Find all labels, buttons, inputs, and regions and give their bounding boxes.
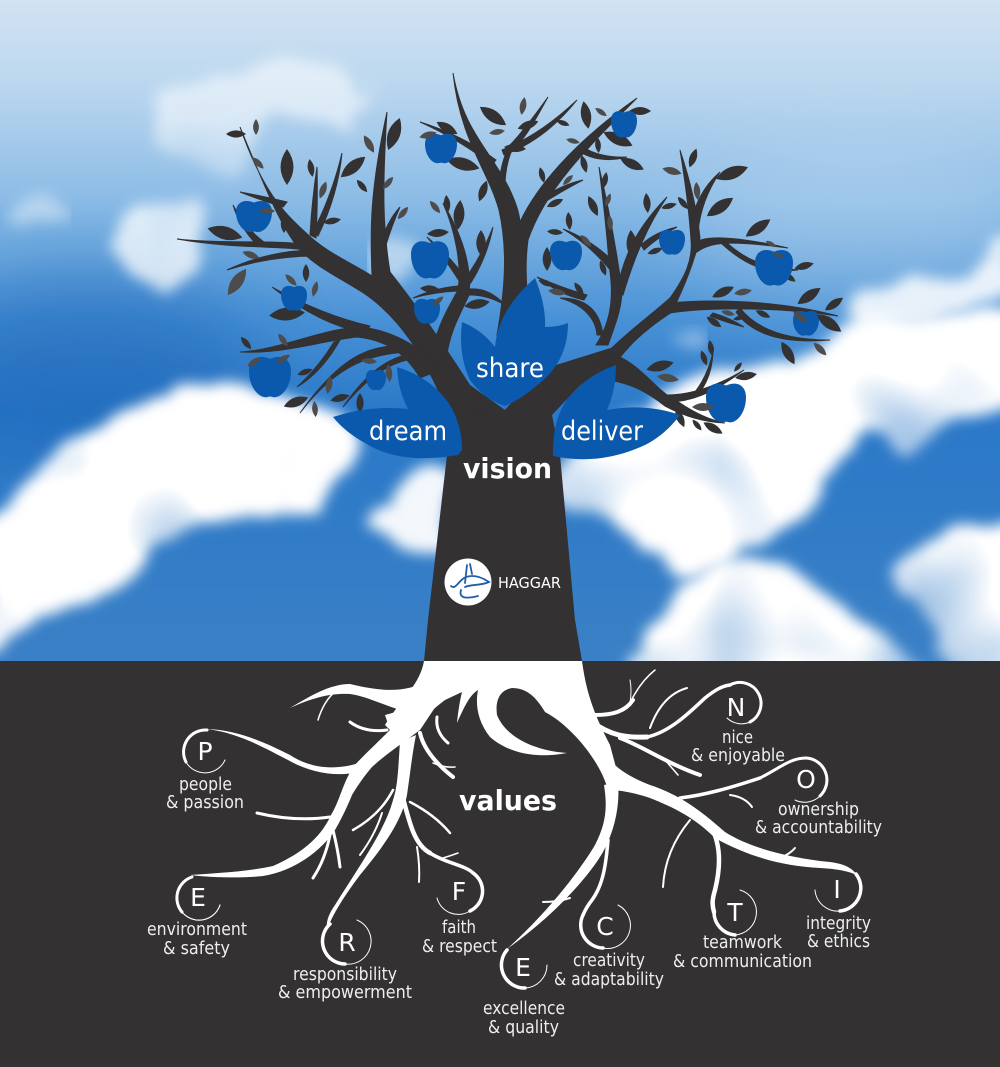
heading: values: values (459, 784, 557, 817)
clouds (0, 65, 1000, 690)
label: share: share (476, 353, 544, 384)
value: E excellence and quality: E (515, 953, 531, 982)
value: C creativity and adaptability: creativity (573, 951, 645, 971)
value: C creativity and adaptability: C (596, 912, 614, 941)
value: T teamwork and communication: & communication (673, 952, 812, 972)
ground (0, 661, 1000, 1067)
value: E environment and safety: environment (147, 920, 247, 940)
value: T teamwork and communication: teamwork (703, 933, 783, 953)
root branches (257, 670, 806, 915)
value: E environment and safety (147, 883, 247, 959)
value: F faith and respect: & respect (422, 937, 497, 957)
value: I integrity and ethics: I (833, 875, 841, 904)
value: T teamwork and communication (673, 898, 812, 972)
branches (177, 73, 838, 423)
trunk (424, 340, 620, 661)
value: E excellence and quality: & quality (488, 1018, 559, 1038)
value: C creativity and adaptability: & adaptability (554, 970, 664, 990)
value: O ownership and accountability (755, 765, 882, 838)
logo: Haggar (444, 558, 561, 606)
value: N nice and enjoyable: nice (722, 728, 753, 748)
petal: deliver (553, 365, 680, 459)
value: E excellence and quality (483, 953, 565, 1038)
value: F faith and respect: F (452, 877, 466, 906)
root mass (385, 661, 622, 790)
root loops around letters (177, 682, 861, 988)
root to E environment (190, 700, 440, 877)
root to P people (207, 729, 365, 774)
value: I integrity and ethics: & ethics (807, 932, 870, 952)
petal: share (461, 278, 568, 406)
value: R responsibility and empowerment: responsibility (293, 965, 397, 985)
value: P people and passion: & passion (166, 793, 244, 813)
grey leaves (223, 97, 844, 417)
value: F faith and respect: faith (442, 918, 476, 938)
value: C creativity and adaptability (554, 912, 664, 990)
roots (177, 661, 861, 988)
label: deliver: deliver (561, 416, 644, 447)
label: dream: dream (369, 416, 447, 447)
heading: vision: vision (463, 452, 552, 485)
sky background (0, 0, 1000, 661)
root to R responsibility (327, 735, 416, 930)
value: N nice and enjoyable: N (727, 693, 745, 722)
value: F faith and respect (422, 877, 497, 957)
value: O ownership and accountability: O (796, 765, 816, 794)
value: O ownership and accountability: ownership (778, 800, 859, 820)
leaves (206, 100, 845, 437)
value: N nice and enjoyable: & enjoyable (691, 746, 785, 766)
value: O ownership and accountability: & accountability (755, 818, 882, 838)
root to I integrity (600, 745, 857, 875)
value: R responsibility and empowerment: R (338, 928, 356, 957)
value: E environment and safety: & safety (163, 939, 230, 959)
value: P people and passion: P (197, 737, 213, 766)
root top left (290, 680, 428, 714)
value: R responsibility and empowerment: & empowerment (278, 983, 412, 1003)
value: R responsibility and empowerment (278, 928, 412, 1003)
logo: Haggar: HAGGAR (498, 574, 561, 592)
value: P people and passion (166, 737, 244, 813)
value: I integrity and ethics (806, 875, 871, 952)
value: P people and passion: people (179, 775, 232, 795)
value: E environment and safety: E (190, 883, 206, 912)
petal: dream (333, 367, 462, 458)
tree (177, 73, 845, 661)
value: N nice and enjoyable (691, 693, 785, 766)
root to E excellence (507, 782, 618, 949)
value: I integrity and ethics: integrity (806, 914, 871, 934)
apples (236, 111, 819, 422)
value: T teamwork and communication: T (726, 898, 743, 927)
value: E excellence and quality: excellence (483, 999, 565, 1019)
